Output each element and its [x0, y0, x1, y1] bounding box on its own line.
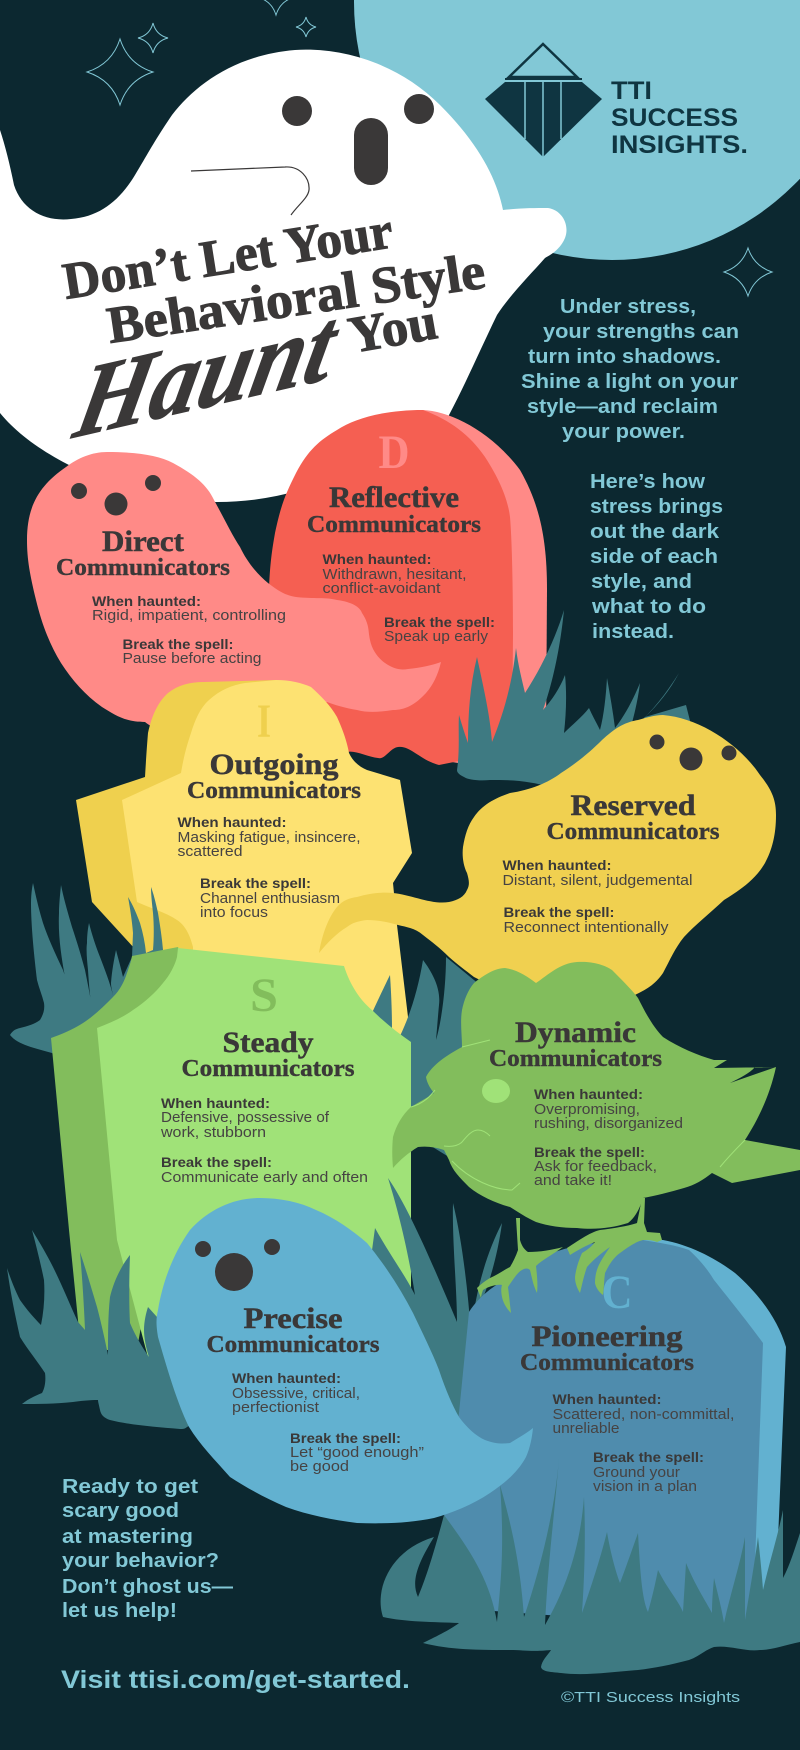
dynamic text: When haunted: — [534, 1086, 643, 1102]
pioneering text: When haunted: — [552, 1391, 662, 1407]
panel: reflective tombstone — [269, 410, 547, 770]
panel: dynamic bird — [392, 962, 800, 1313]
outgoing text: Communicators — [187, 778, 361, 804]
panel: steady tombstone — [51, 947, 411, 1365]
bird body — [392, 962, 800, 1229]
reflective text: When haunted: — [322, 551, 432, 567]
title: You — [344, 293, 442, 365]
grass behind steady tombstone, right — [372, 957, 480, 1170]
precise text: perfectionist — [232, 1400, 319, 1416]
logo wordmark: INSIGHTS. — [611, 131, 748, 159]
direct text: When haunted: — [92, 593, 201, 609]
steady text: work, stubborn — [160, 1125, 266, 1141]
tombstone side — [51, 947, 200, 1360]
call to action: Don’t ghost us— — [62, 1576, 233, 1598]
reflective text: Reflective — [329, 481, 459, 514]
tombstone side — [420, 410, 547, 770]
steady text: Steady — [222, 1026, 314, 1059]
reflective text: Communicators — [307, 512, 481, 538]
precise text: Communicators — [206, 1332, 380, 1358]
copyright: ©TTI Success Insights — [561, 1689, 740, 1706]
reserved text: Break the spell: — [504, 904, 614, 920]
call to action: at mastering — [62, 1526, 193, 1548]
explanation text: what to do — [591, 596, 706, 618]
steady text: Communicators — [182, 1056, 354, 1082]
pioneering text — [520, 1320, 734, 1495]
pioneering text: Communicators — [520, 1350, 694, 1376]
outgoing text: Outgoing — [210, 748, 338, 781]
panel: outgoing tombstone — [76, 680, 412, 1042]
reflective text: Withdrawn, hesitant, — [322, 567, 466, 583]
explanation text: Here’s how — [590, 471, 705, 493]
dynamic text: Dynamic — [515, 1016, 636, 1049]
outgoing text — [178, 748, 361, 921]
ghost arm line — [191, 167, 309, 215]
dynamic text: Overpromising, — [534, 1102, 640, 1118]
ghost eyes and mouth — [282, 94, 434, 185]
outgoing text: Break the spell: — [200, 875, 311, 891]
intro text: Under stress, — [560, 296, 696, 318]
grass near reflective tombstone — [457, 610, 700, 790]
outgoing text: Masking fatigue, insincere, — [178, 830, 360, 846]
logo wordmark: TTI — [611, 77, 652, 105]
tombstone side — [643, 1240, 786, 1630]
reflective text: Speak up early — [384, 629, 489, 645]
intro text: your power. — [562, 421, 685, 443]
tombstone front — [269, 410, 513, 765]
sparkle stars — [87, 0, 772, 296]
steady text: Break the spell: — [161, 1154, 272, 1170]
explanation text: stress brings — [590, 496, 723, 518]
reserved text: When haunted: — [502, 857, 612, 873]
call to action: scary good — [62, 1500, 179, 1522]
direct text: Rigid, impatient, controlling — [92, 608, 286, 624]
large white ghost — [0, 50, 566, 502]
teal circle — [354, 0, 800, 260]
explanation text: out the dark — [590, 521, 720, 543]
explanation text: side of each — [590, 546, 718, 568]
pioneering text: Break the spell: — [593, 1449, 704, 1465]
ghost eyes — [71, 475, 161, 516]
steady text: Communicate early and often — [161, 1170, 368, 1186]
tombstone front — [122, 680, 412, 1042]
dynamic text: rushing, disorganized — [534, 1116, 683, 1132]
direct text: Communicators — [56, 555, 230, 581]
steady text — [160, 1026, 368, 1186]
pioneering text: Scattered, non-committal, — [552, 1407, 734, 1423]
letter S: S — [250, 969, 278, 1022]
title: Behavioral Style — [103, 243, 489, 355]
precise text — [206, 1302, 424, 1475]
call to action: your behavior? — [62, 1550, 219, 1572]
intro text: your strengths can — [543, 321, 739, 343]
grass center — [360, 1178, 502, 1450]
reserved text: Communicators — [546, 819, 720, 845]
intro text: turn into shadows. — [528, 346, 721, 368]
grass behind steady tombstone, left — [10, 883, 200, 1060]
direct text: Pause before acting — [122, 651, 262, 667]
reserved text: Reserved — [570, 789, 696, 822]
title — [59, 202, 489, 462]
outgoing text: Channel enthusiasm — [200, 891, 340, 907]
outgoing text: scattered — [178, 844, 242, 860]
reflective text: Break the spell: — [384, 614, 495, 630]
logo wordmark — [611, 77, 748, 159]
letter C: C — [602, 1266, 632, 1319]
reserved text — [502, 789, 720, 936]
dynamic text: Communicators — [489, 1046, 662, 1072]
panel: precise ghost — [156, 1198, 533, 1523]
panel: reserved ghost — [319, 715, 776, 1020]
intro text — [521, 296, 739, 443]
direct text — [56, 525, 286, 667]
precise text: Let “good enough” — [290, 1445, 424, 1461]
precise text: Break the spell: — [290, 1430, 401, 1446]
dynamic text: Break the spell: — [534, 1144, 645, 1160]
grass bottom right — [381, 1458, 800, 1674]
reserved text: Reconnect intentionally — [504, 920, 669, 936]
bird feather lines — [411, 1040, 745, 1190]
logo wordmark: SUCCESS — [611, 104, 738, 132]
reflective text: conflict-avoidant — [322, 581, 440, 597]
call to action: let us help! — [62, 1600, 177, 1622]
precise text: be good — [290, 1459, 349, 1475]
pioneering text: unreliable — [552, 1421, 620, 1437]
pioneering text: Ground your — [593, 1465, 680, 1481]
explanation text: instead. — [592, 621, 674, 643]
intro text: style—and reclaim — [527, 396, 718, 418]
website link: Visit ttisi.com/get-started. — [61, 1666, 410, 1694]
logo — [485, 44, 748, 159]
ghost eyes — [650, 734, 736, 770]
explanation text: style, and — [591, 571, 692, 593]
dynamic text — [489, 1016, 683, 1189]
letter I: I — [257, 695, 271, 748]
panel: pioneering tombstone — [440, 1240, 786, 1630]
title: Don’t Let Your — [59, 202, 397, 311]
intro text: Shine a light on your — [521, 371, 738, 393]
direct text: Break the spell: — [122, 636, 234, 652]
tombstone front — [440, 1240, 763, 1630]
steady text: When haunted: — [161, 1095, 270, 1111]
bird eye — [482, 1079, 510, 1103]
dynamic text: and take it! — [534, 1173, 612, 1189]
outgoing text: When haunted: — [178, 814, 286, 830]
explanation text — [590, 471, 723, 643]
precise text: Precise — [244, 1302, 342, 1335]
steady text: Defensive, possessive of — [161, 1110, 330, 1126]
precise text: When haunted: — [232, 1370, 341, 1386]
call to action — [62, 1476, 233, 1622]
outgoing text: into focus — [200, 905, 268, 921]
letter D: D — [378, 426, 410, 479]
tombstone front — [97, 948, 411, 1365]
call to action: Ready to get — [62, 1476, 198, 1498]
logo mark — [485, 44, 602, 157]
bird legs and claws — [477, 1198, 662, 1313]
dynamic text: Ask for feedback, — [534, 1159, 657, 1175]
pioneering text: vision in a plan — [593, 1479, 697, 1495]
direct text: Direct — [102, 525, 184, 558]
reserved text: Distant, silent, judgemental — [502, 873, 692, 889]
ghost eyes — [195, 1239, 280, 1291]
pioneering text: Pioneering — [532, 1320, 682, 1353]
grass lower left — [7, 1230, 200, 1429]
title: Haunt — [65, 285, 349, 462]
tombstone side — [76, 680, 300, 960]
panel: direct ghost — [27, 452, 441, 740]
reflective text — [307, 481, 495, 645]
precise text: Obsessive, critical, — [232, 1386, 360, 1402]
